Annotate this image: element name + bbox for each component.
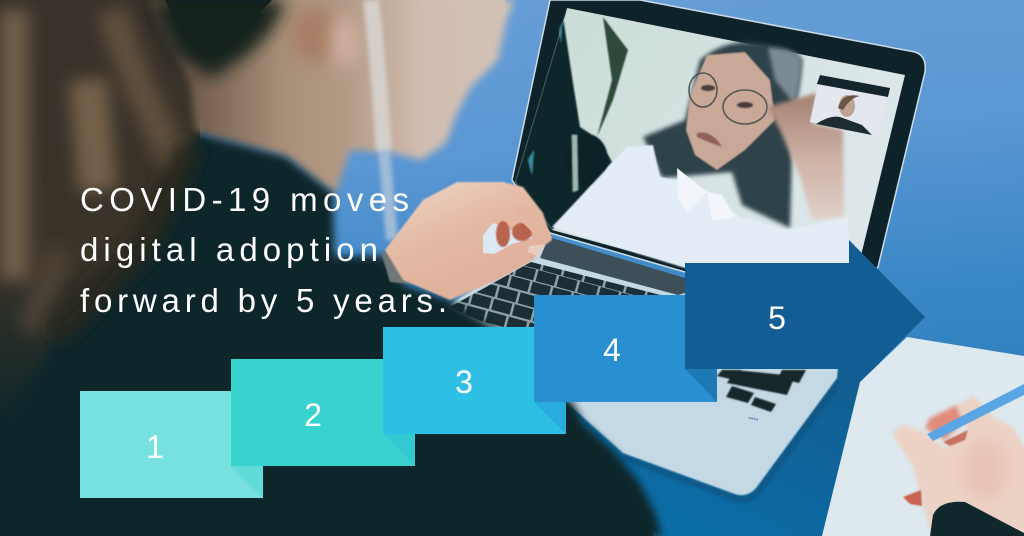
keyboard [450,262,807,420]
title: digital adoption [80,231,378,268]
video call: plant [515,8,628,230]
right hand with pen [892,384,1024,536]
title: COVID-19 moves [80,181,409,218]
step 1 [80,391,263,498]
hand underlay at frame edge [1000,440,1024,530]
hand on laptop [381,182,552,300]
step 1: 1 [146,429,164,465]
step 4 [534,295,717,402]
dark jacket [0,133,662,536]
reddish skin near ear [291,7,339,63]
keyboard: •••• [748,415,759,424]
hand shadow [963,440,1007,500]
title: forward by 5 years. [80,282,447,319]
index finger tip [512,206,552,240]
upper fingers [925,405,965,440]
jacket underlay at frame bottom [0,400,653,536]
step 3 [383,327,566,434]
lower keys [717,370,806,412]
step 2: 2 [304,397,322,433]
finger gap [483,223,533,254]
hand [892,395,1024,536]
eyes and lips [697,85,753,147]
sleeve [930,502,1024,536]
step 5 arrow: 5 [768,300,786,336]
face [686,52,775,170]
dark hair crown underlay [165,0,272,28]
glasses [689,73,767,124]
hand outline [385,182,552,300]
laptop [440,0,925,500]
fingers [496,221,532,247]
step 4: 4 [603,332,621,368]
step 5 arrow [685,240,925,393]
sleeve cuff [381,250,410,284]
screen bezel [512,0,925,285]
long hair [0,0,200,460]
step 2 [231,359,415,466]
hair [643,42,802,228]
bottom finger [903,490,922,506]
earphone cable [371,0,392,240]
video call: woman [552,42,852,268]
shirt [552,145,852,268]
step 3: 3 [455,364,473,400]
hinge [540,238,685,295]
thumb nail [527,244,545,256]
raised hand [767,93,844,220]
deck shadow [623,382,838,500]
head underlay at frame top [200,0,505,14]
screen [515,8,905,268]
title [80,181,447,319]
foreground person [0,0,662,536]
dark hair crown [150,0,285,78]
video call: thumbnail window [810,75,890,137]
laptop base deck [440,245,840,495]
ear [331,16,359,68]
lower red finger [943,430,968,446]
head and neck [150,0,515,195]
notebook paper [822,337,1024,536]
pen [927,384,1024,441]
blue desk [540,345,880,536]
soft hair edge over jacket [55,145,190,335]
